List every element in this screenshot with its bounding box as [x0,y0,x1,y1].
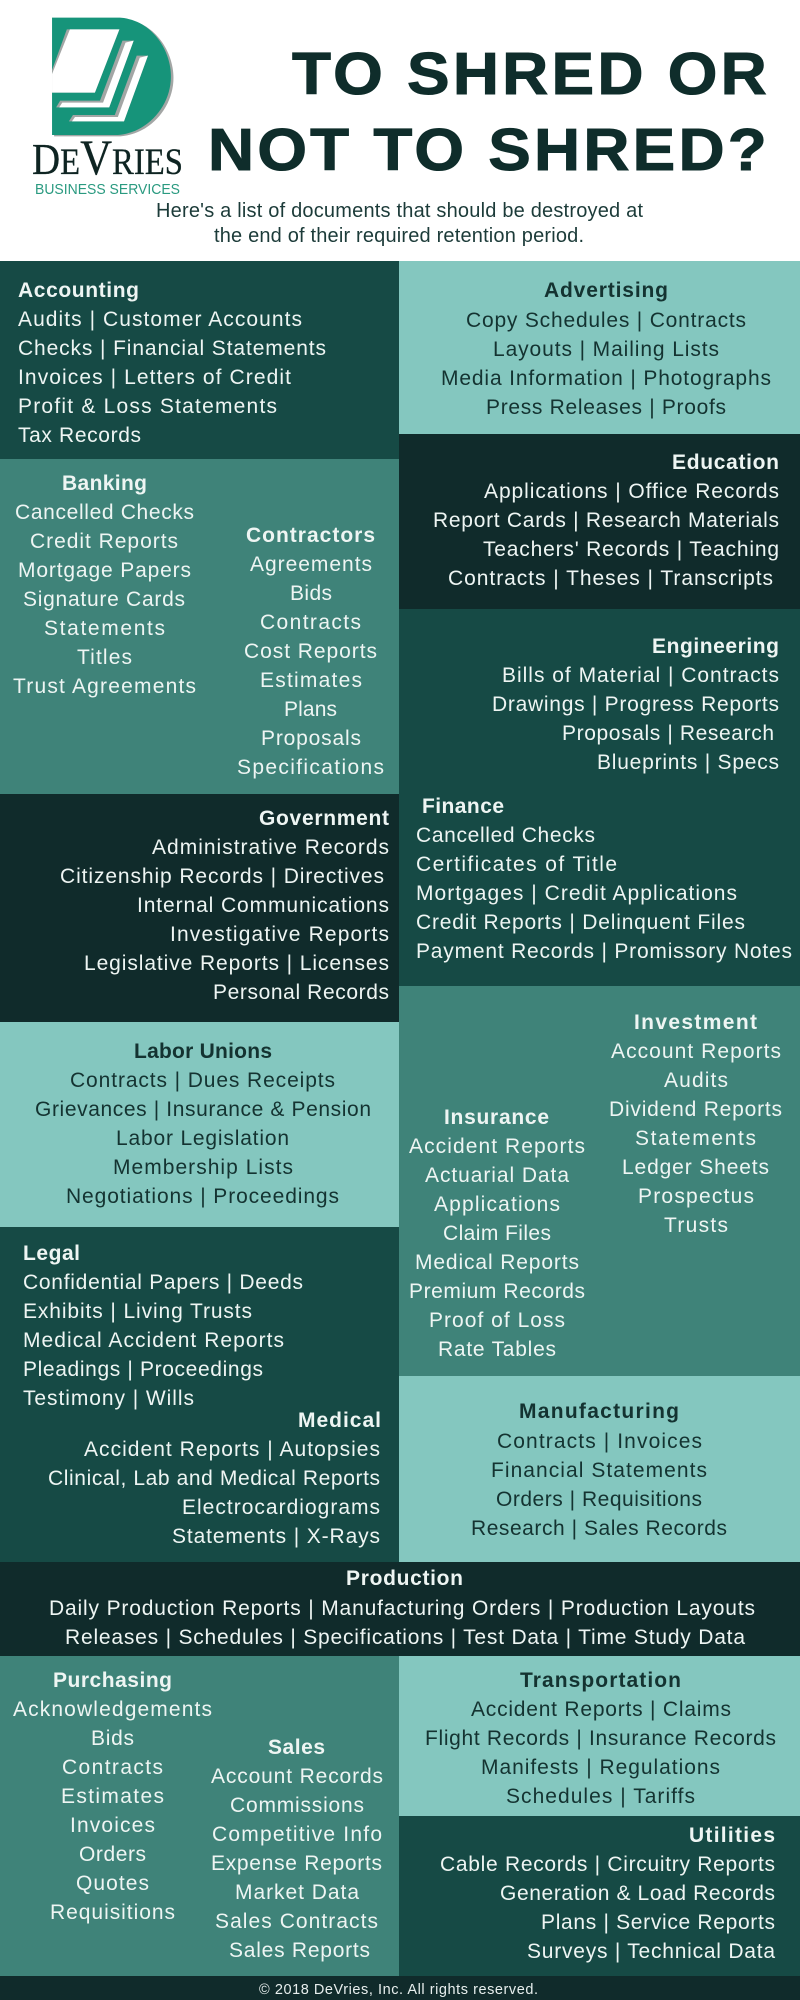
list: utilities [440,1853,775,1963]
list: engineering: Drawings | Progress Reports [492,693,779,716]
list: utilities: Cable Records | Circuitry Reports [440,1853,775,1876]
list: government: Internal Communications [137,894,389,917]
list: purchasing: Bids [91,1727,134,1750]
list: medical: Clinical, Lab and Medical Reports [48,1467,380,1490]
list: engineering [492,664,779,774]
list: contractors: Cost Reports [244,640,377,663]
panel: manufacturing [399,1376,800,1562]
list: advertising: Press Releases | Proofs [486,396,726,419]
list: insurance: Rate Tables [438,1338,556,1361]
list: purchasing: Requisitions [50,1901,175,1924]
list: engineering: Bills of Material | Contracts [502,664,779,687]
list: education: Teachers' Records | Teaching [483,538,779,561]
heading: production: Production [346,1567,463,1590]
heading: medical: Medical [298,1409,381,1432]
list: legal: Pleadings | Proceedings [23,1358,263,1381]
list: accounting: Profit & Loss Statements [18,395,277,418]
list: advertising: Layouts | Mailing Lists [493,338,719,361]
intro text [156,200,643,247]
list: education [433,480,779,590]
heading: sales: Sales [268,1736,325,1759]
list: finance: Payment Records | Promissory Notes [416,940,792,963]
list: transportation: Schedules | Tariffs [506,1785,695,1808]
list: banking: Credit Reports [30,530,178,553]
list: transportation: Manifests | Regulations [481,1756,720,1779]
list: manufacturing [471,1430,727,1540]
intro text: Here's a list of documents that should be destroyed at [156,200,643,222]
list: advertising: Copy Schedules | Contracts [466,309,746,332]
list: manufacturing: Financial Statements [491,1459,707,1482]
list: utilities: Plans | Service Reports [541,1911,775,1934]
list: finance: Mortgages | Credit Applications [416,882,737,905]
heading: banking: Banking [62,472,147,495]
list: accounting: Checks | Financial Statements [18,337,326,360]
heading: labor unions: Labor Unions [134,1040,272,1063]
list: insurance: Proof of Loss [429,1309,565,1332]
heading: education: Education [672,451,779,474]
list: insurance: Applications [434,1193,560,1216]
wordmark: DEVRIES [32,129,183,185]
footer [0,1976,800,2000]
list: education: Contracts | Theses | Transcripts [448,567,773,590]
list: purchasing: Acknowledgements [13,1698,212,1721]
panel: advertising [399,261,800,434]
list: investment [609,1040,782,1237]
list: labor unions: Grievances | Insurance & Pension [35,1098,371,1121]
list: accounting: Invoices | Letters of Credit [18,366,291,389]
list: government: Investigative Reports [170,923,389,946]
panel: education [399,434,800,609]
list: contractors: Agreements [250,553,372,576]
list: utilities: Surveys | Technical Data [527,1940,775,1963]
list: manufacturing: Contracts | Invoices [497,1430,702,1453]
list: accounting: Audits | Customer Accounts [18,308,302,331]
list: labor unions: Negotiations | Proceedings [66,1185,339,1208]
icon: stylised D mark [52,18,173,136]
list: utilities: Generation & Load Records [500,1882,775,1905]
list: insurance: Accident Reports [409,1135,585,1158]
list: finance: Credit Reports | Delinquent Files [416,911,745,934]
list: sales [211,1765,383,1962]
heading: accounting: Accounting [18,279,139,302]
title [208,41,770,183]
list: investment: Audits [664,1069,728,1092]
list: government: Administrative Records [152,836,389,859]
list: engineering: Proposals | Research [562,722,774,745]
copyright: © 2018 DeVries, Inc. All rights reserved. [259,1982,538,1998]
list: medical: Statements | X-Rays [172,1525,380,1548]
panel: insurance and investment [399,986,800,1376]
title: NOT TO SHRED? [208,117,770,183]
panel: utilities [399,1816,800,1976]
list: insurance: Claim Files [443,1222,551,1245]
list: transportation: Flight Records | Insurance Records [425,1727,776,1750]
heading: insurance: Insurance [444,1106,549,1129]
list: medical: Accident Reports | Autopsies [84,1438,380,1461]
list: banking [13,501,196,698]
list: purchasing: Quotes [76,1872,149,1895]
list: investment: Account Reports [611,1040,781,1063]
list: investment: Trusts [664,1214,728,1237]
list: government [60,836,389,1004]
list: labor unions: Labor Legislation [116,1127,289,1150]
list: production [49,1597,755,1649]
list: finance: Cancelled Checks [416,824,595,847]
list: education: Applications | Office Records [484,480,779,503]
logo: DeVries Business Services [32,18,183,198]
list: advertising: Media Information | Photographs [441,367,771,390]
list: finance [416,824,792,963]
list: purchasing: Estimates [61,1785,164,1808]
panel: labor unions [0,1022,400,1227]
list: investment: Dividend Reports [609,1098,782,1121]
list: education: Report Cards | Research Materials [433,509,779,532]
list: manufacturing: Research | Sales Records [471,1517,727,1540]
list: purchasing: Orders [79,1843,146,1866]
list: sales: Account Records [211,1765,383,1788]
list: medical [48,1438,380,1548]
heading: utilities: Utilities [689,1824,775,1847]
list: contractors: Estimates [260,669,362,692]
list: contractors: Plans [284,698,337,721]
list: banking: Statements [44,617,165,640]
list: purchasing: Contracts [62,1756,163,1779]
list: sales: Commissions [230,1794,364,1817]
list: sales: Expense Reports [211,1852,382,1875]
panel: legal and medical [0,1227,400,1562]
list: labor unions: Membership Lists [113,1156,293,1179]
list: labor unions: Contracts | Dues Receipts [70,1069,335,1092]
list: advertising [441,309,771,419]
panel: purchasing and sales [0,1656,399,1976]
list: insurance: Premium Records [409,1280,585,1303]
list: legal [23,1271,303,1410]
panel: accounting [0,261,400,459]
heading: purchasing: Purchasing [53,1669,172,1692]
list: transportation: Accident Reports | Claims [471,1698,731,1721]
panel: engineering and finance [399,609,800,986]
list: contractors: Bids [290,582,332,605]
list: purchasing: Invoices [70,1814,155,1837]
list: banking: Mortgage Papers [18,559,191,582]
list: legal: Confidential Papers | Deeds [23,1271,303,1294]
list: accounting [18,308,326,447]
list: contractors [237,553,384,779]
list: government: Citizenship Records | Directives [60,865,384,888]
list: sales: Competitive Info [212,1823,382,1846]
list: legal: Testimony | Wills [23,1387,194,1410]
list: banking: Trust Agreements [13,675,196,698]
list: labor unions [35,1069,371,1208]
list: sales: Market Data [235,1881,359,1904]
panel: production [0,1562,800,1656]
panel: banking and contractors [0,459,400,794]
tagline: BUSINESS SERVICES [35,182,180,198]
list: manufacturing: Orders | Requisitions [496,1488,702,1511]
list: insurance [409,1135,585,1361]
list: investment: Prospectus [638,1185,754,1208]
list: insurance: Medical Reports [415,1251,579,1274]
list: production: Daily Production Reports | Manufacturing Orders | Production Layouts [49,1597,755,1620]
list: sales: Sales Contracts [215,1910,378,1933]
list: investment: Statements [635,1127,756,1150]
list: legal: Medical Accident Reports [23,1329,284,1352]
list: medical: Electrocardiograms [182,1496,380,1519]
heading: advertising: Advertising [544,279,668,302]
list: finance: Certificates of Title [416,853,617,876]
panel: government [0,794,400,1022]
list: contractors: Specifications [237,756,384,779]
list: transportation [425,1698,776,1808]
heading: finance: Finance [422,795,504,818]
list: sales: Sales Reports [229,1939,370,1962]
title: TO SHRED OR [292,41,770,107]
heading: manufacturing: Manufacturing [519,1400,679,1423]
heading: legal: Legal [23,1242,80,1265]
panel: transportation [399,1656,800,1816]
list: contractors: Contracts [260,611,361,634]
list: banking: Signature Cards [23,588,185,611]
list: government: Legislative Reports | Licenses [84,952,389,975]
list: government: Personal Records [213,981,389,1004]
list: banking: Titles [77,646,132,669]
list: purchasing [13,1698,212,1924]
heading: government: Government [259,807,389,830]
list: engineering: Blueprints | Specs [597,751,779,774]
list: legal: Exhibits | Living Trusts [23,1300,252,1323]
list: insurance: Actuarial Data [425,1164,569,1187]
list: contractors: Proposals [261,727,361,750]
list: production: Releases | Schedules | Specifications | Test Data | Time Study Data [65,1626,745,1649]
list: investment: Ledger Sheets [622,1156,769,1179]
heading: engineering: Engineering [652,635,779,658]
list: accounting: Tax Records [18,424,141,447]
heading: investment: Investment [634,1011,757,1034]
heading: contractors: Contractors [246,524,375,547]
list: banking: Cancelled Checks [15,501,194,524]
heading: transportation: Transportation [520,1669,681,1692]
intro text: the end of their required retention period. [214,225,584,247]
